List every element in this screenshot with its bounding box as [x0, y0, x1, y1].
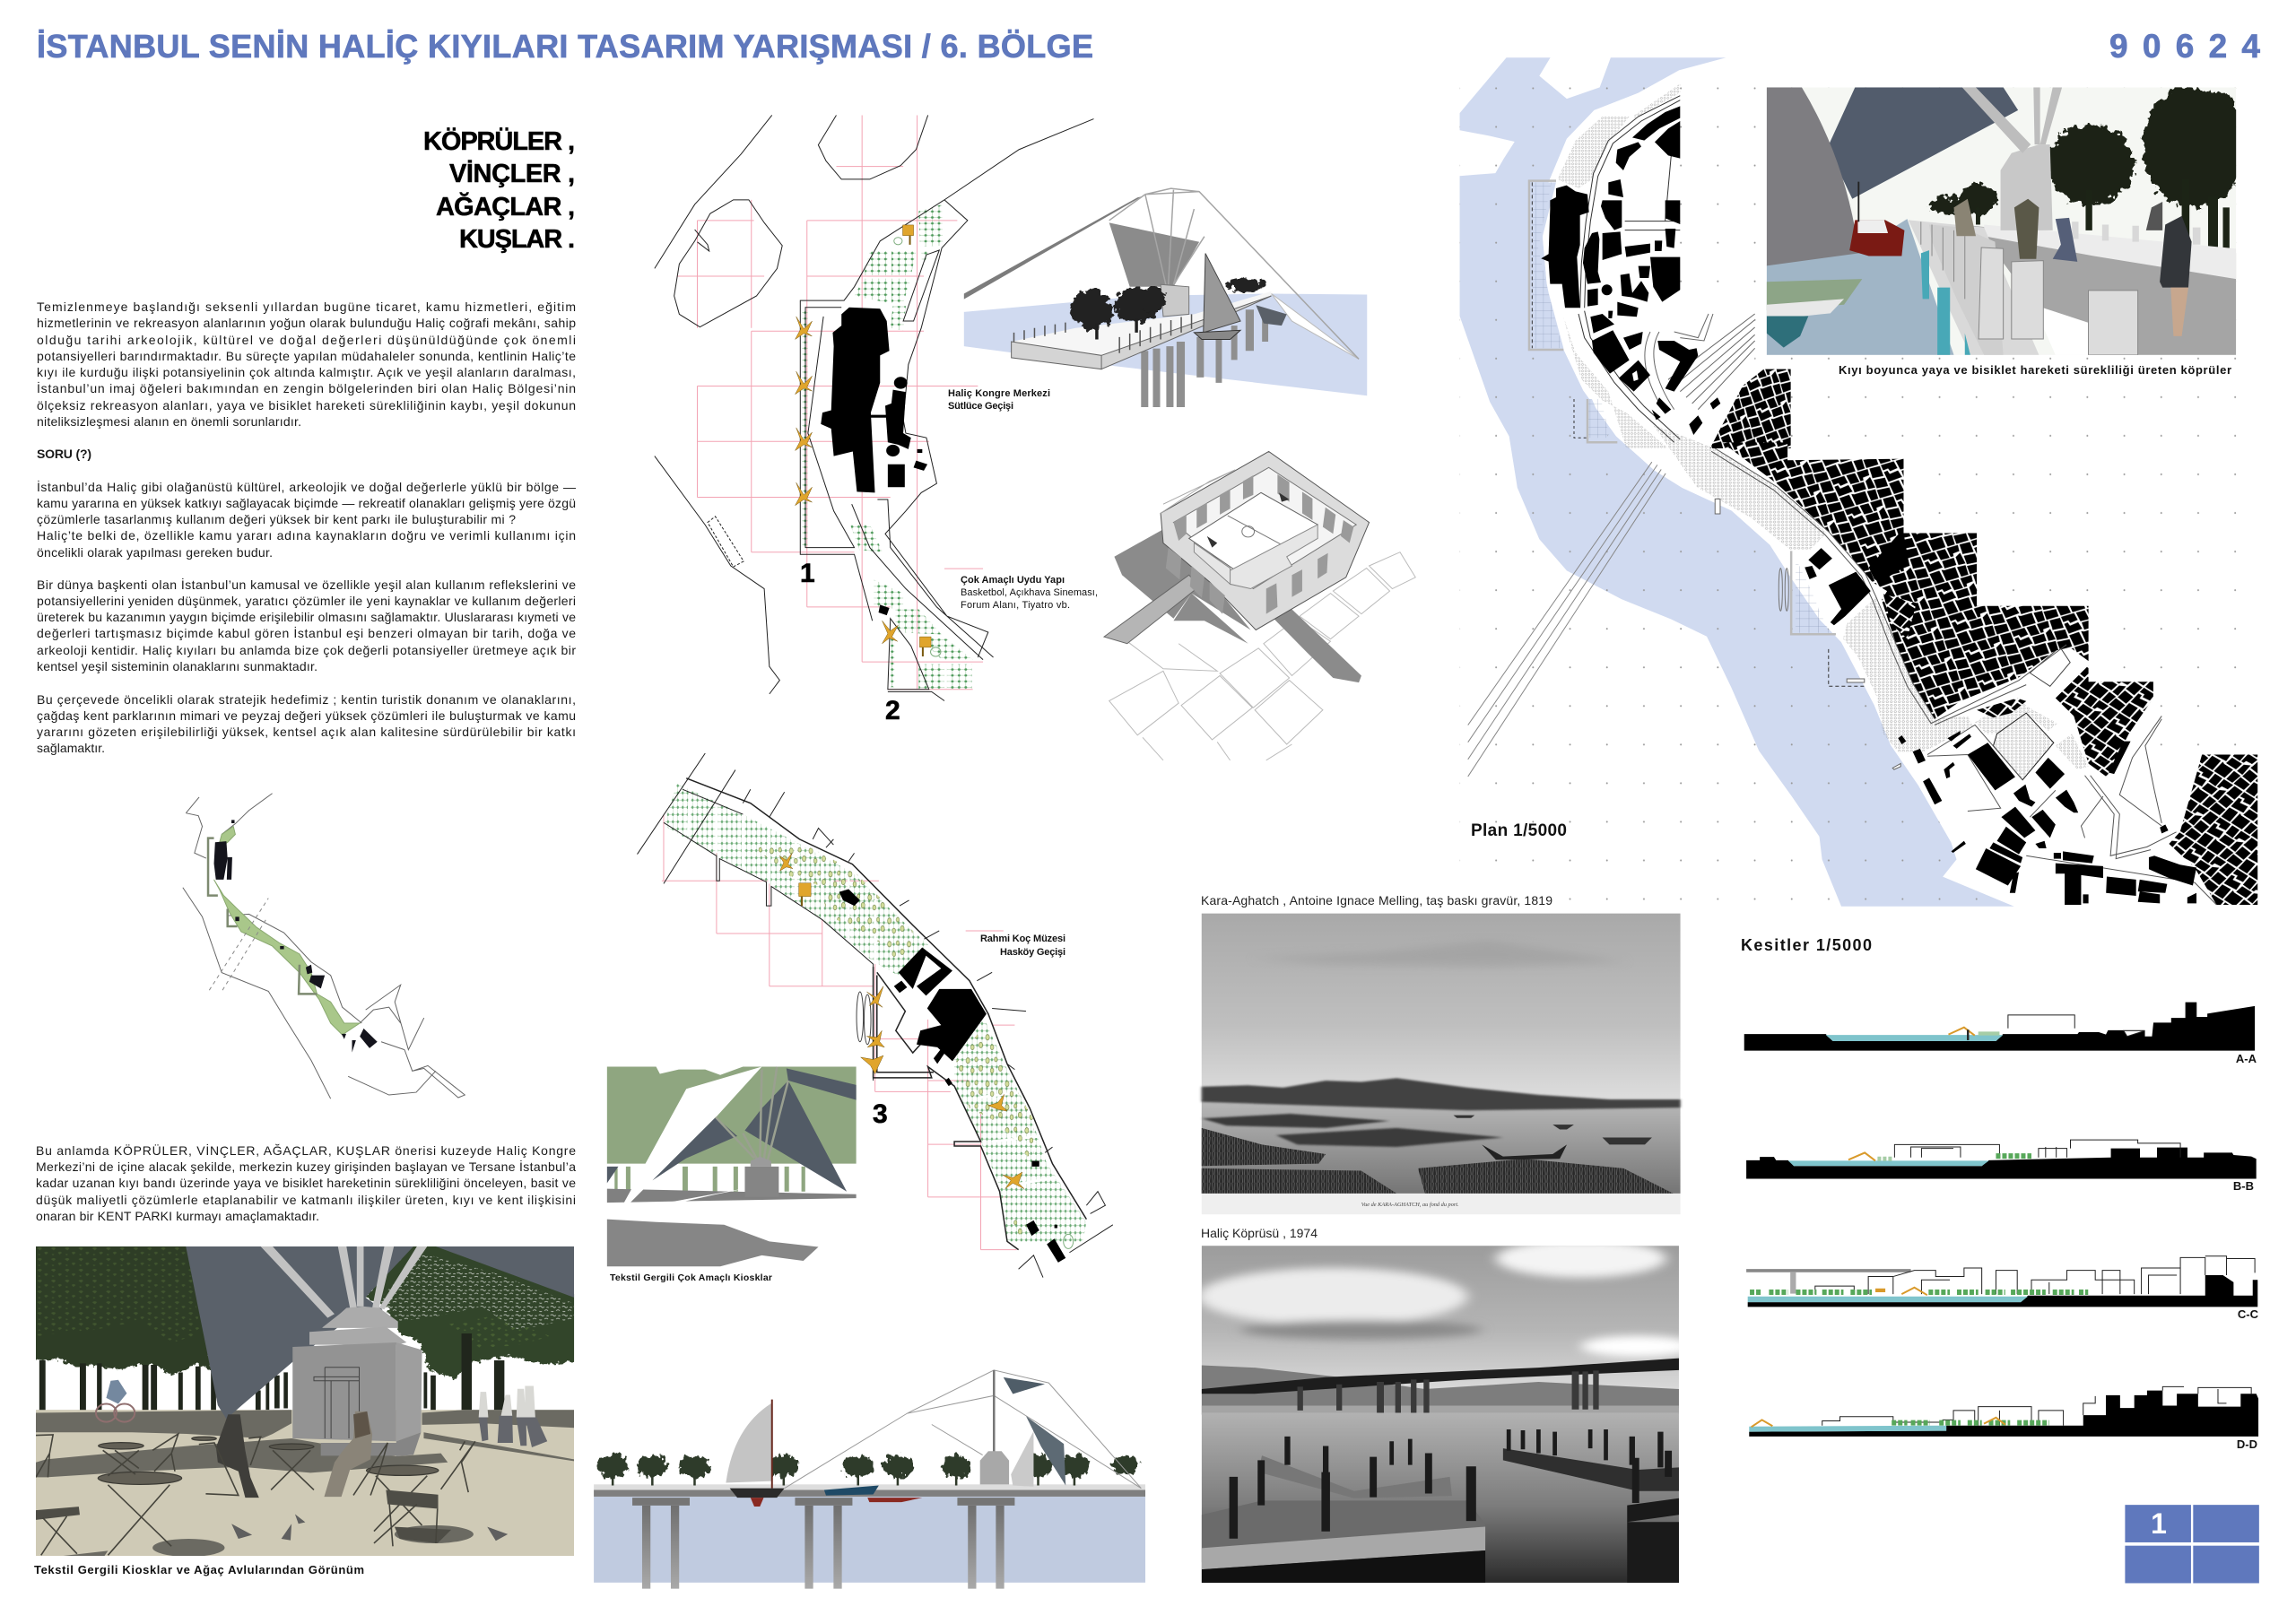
label: Rahmi Koç crossing: Rahmi Koç Müzesi: [980, 934, 1065, 944]
text block: introduction: İstanbul’un imaj öğeleri bakımından en zengin bölgelerinden biri olan Haliç Bölgesi’nin: [37, 380, 576, 395]
text block: introduction: potansiyellerini yeniden düşünmek, yaratıcı çözümler ile yeni kaynaklar ve kullanım değerleri: [37, 594, 576, 608]
text block: introduction: [37, 300, 576, 755]
large sail: [1767, 87, 1859, 265]
label: congress crossing: Haliç Kongre Merkezi: [948, 388, 1050, 399]
plan: Hasköy crossing: [638, 753, 1113, 1278]
trees: [1930, 87, 2242, 215]
photo: kiosks and tree courtyards: [26, 1238, 585, 1557]
historic engraving: [1202, 914, 1681, 1214]
text block: introduction: Temizlenmeye başlandığı seksenli yıllardan bugüne ticaret, kamu hizmetleri, eğitim: [37, 300, 576, 314]
ground: [36, 1410, 574, 1556]
orange cranes: [796, 317, 898, 644]
text block: introduction: sağlamaktır.: [37, 741, 105, 755]
text block: introduction: hizmetlerinin ve rekreasyon alanlarının yoğun olarak bulunduğu Haliç coğrafi mekânı, sahip: [37, 316, 576, 330]
buildings: [839, 890, 1065, 1263]
label B-B: B-B: [2233, 1179, 2254, 1193]
caption: kiosk view: Tekstil Gergili Kiosklar ve Ağaç Avlularından Görünüm: [34, 1563, 364, 1576]
heading: sections: Kesitler 1/5000: [1741, 936, 1872, 954]
land mask: [1542, 70, 2257, 907]
plan 1/5000: [1460, 57, 2258, 907]
orange cranes: [779, 853, 1024, 1189]
kiosk: [323, 1307, 398, 1328]
tables and chairs: [36, 1434, 475, 1555]
green tree grid: [802, 204, 973, 690]
text block: introduction: öncelikli olarak yapılması gereken budur.: [37, 545, 273, 560]
sail boat: [726, 1403, 772, 1482]
text block: introduction: Bir dünya başkenti olan İstanbul’un kamusal ve özellikle yeşil alan kullanım reflekslerini ve: [37, 577, 576, 592]
boats: [857, 992, 864, 1042]
text block: introduction: arkeoloji kentidir. Haliç kıyıları bu anlamda bize çok değerli potansiyeller üretmeye açık bir: [37, 643, 576, 657]
caption: shoreline bridges: Kıyı boyunca yaya ve bisiklet hareketi sürekliliği üreten köprüler: [1839, 363, 2231, 377]
bridge elevation: [594, 1370, 1145, 1589]
label C-C: C-C: [2238, 1307, 2259, 1321]
label: congress crossing: Sütlüce Geçişi: [948, 401, 1013, 412]
satellite building axonometric: [1104, 451, 1415, 760]
roads: [1578, 96, 1680, 442]
congress centre buildings: [821, 308, 927, 615]
central and southern plan: [1653, 424, 2257, 905]
red boat: [1849, 220, 1904, 256]
label: satellite building: Çok Amaçlı Uydu Yapı: [961, 575, 1065, 586]
zone number 3: 3: [873, 1099, 888, 1129]
text block: introduction: Bu çerçevede öncelikli olarak stratejik hedefimiz ; kentin turistik donanım ve olanaklarını,: [37, 692, 576, 707]
dense urban fabric: [1710, 369, 1791, 448]
text block: introduction: kıyı ile kurduğu ilişki potansiyelinin çok altında kalmıştır. Açık ve yeşil alanların daralması,: [37, 365, 576, 379]
text block: proposal summary: düşük maliyetli çözümlerle etaplanabilir ve katmanlı ilişkiler üreten, kıyı ve kent ilişkisini: [36, 1193, 576, 1207]
bridge lines: [1468, 462, 1665, 777]
third pier: [1796, 559, 1831, 633]
sheet number: 1: [2151, 1507, 2167, 1540]
heading: concept words: KÖPRÜLER ,: [423, 126, 575, 156]
text block: introduction: Haliç’te belki de, özellikle kamu yararı adına kaynakların doğru ve verimli kullanımı için: [37, 528, 576, 543]
text block: introduction: üreterek bu kazanımın yaygın biçimde erişilebilir olmasını sağlamaktır. Uluslararası kıymeti ve: [37, 610, 576, 624]
white cross paths: [688, 784, 1072, 1186]
photo: pedestrian bridge view: [1767, 87, 2242, 355]
label: Rahmi Koç crossing: Hasköy Geçişi: [1000, 947, 1065, 958]
people: [1954, 199, 2192, 336]
text block: introduction: kamu yararına en yüksek katkıyı sağlayacak biçimde — rekreatif olanakları gelişmiş yere özgü: [37, 496, 576, 510]
section C-C: [1746, 1256, 2257, 1307]
textile kiosk view: [607, 1067, 857, 1266]
text block: introduction: ölçeksiz rekreasyon alanları, yaya ve bisiklet hareketi sürekliliğinin kaybı, yeşil dokunun: [37, 398, 576, 413]
Haliç Bridge photo: [1198, 1239, 1694, 1583]
large buildings: [1805, 548, 2196, 905]
text block: proposal summary: kadar uzanan kıyı bandı üzerinde yaya ve bisiklet hareketinin sürekliliğini önceleyen, basit ve: [36, 1176, 576, 1190]
canopy and kiosk: [785, 1370, 1141, 1489]
text block: introduction: değerleri tartışmasız biçimde kabul gören İstanbul eşi benzeri olmayan bir tarih, doğa ve: [37, 625, 576, 640]
section B-B: [1746, 1140, 2257, 1179]
water: [1460, 57, 2014, 907]
text block: introduction: olduğu tarihi arkeolojik, kültürel ve doğal değerleri düşünüldüğünde çok önemli: [37, 333, 576, 347]
label D-D: D-D: [2237, 1437, 2257, 1451]
text block: proposal summary: Merkezi’ni de içine alacak şekilde, merkezin kuzey girişinden başlayan ve Tersane İstanbul’a: [36, 1159, 576, 1174]
water: [1767, 219, 1954, 355]
trees: [26, 1238, 585, 1423]
kiosk and masts: [2001, 144, 2053, 230]
buildings: [1541, 106, 1720, 435]
marsh: [1202, 1114, 1503, 1147]
figures: [96, 1380, 547, 1498]
coast outlines: [686, 778, 1086, 1220]
canopy: [186, 1246, 413, 1419]
green boat: [1767, 279, 1862, 310]
text block: introduction: niteliksizleşmesi alanın en önemli sorunlarıdır.: [37, 414, 301, 429]
caption: textile kiosks: Tekstil Gergili Çok Amaçlı Kiosklar: [610, 1272, 772, 1283]
walkway: [1962, 224, 2236, 355]
text block: introduction: çağdaş kent parklarının mimari ve peyzaj değeri yüksek çözümleri ile buluşturmak ve kamu: [37, 708, 576, 723]
sheet index squares: [2125, 1505, 2259, 1583]
text block: introduction: yararını gözeten erişilebilirliği yüksek, kentsel açık alan kalitesine sürdürülebilir bir katkı: [37, 725, 576, 739]
piers: [1532, 182, 1608, 438]
tree strips: [1653, 424, 2057, 751]
heading: concept words: [423, 126, 575, 254]
water: [1202, 1412, 1679, 1583]
railway lines: [1645, 314, 1755, 413]
clouds: [1198, 1239, 1694, 1357]
label: satellite building: Basketbol, Açıkhava Sineması,: [961, 587, 1098, 598]
tree strips: [1558, 117, 1668, 448]
caption: historic engraving: Kara-Aghatch , Antoine Ignace Melling, taş baskı gravür, 1819: [1201, 893, 1552, 908]
far shore: [1202, 1366, 1679, 1415]
caption: Haliç Bridge: Haliç Köprüsü , 1974: [1201, 1226, 1318, 1240]
pier wall: [1909, 220, 2039, 355]
label: satellite building: [961, 575, 1098, 611]
label A-A: A-A: [2236, 1052, 2257, 1065]
text block: introduction: SORU (?): [37, 447, 91, 461]
red grid: [677, 115, 983, 690]
trees: [596, 1455, 1138, 1477]
plan: Haliç Congress Centre crossing: [655, 115, 1093, 701]
title: İSTANBUL SENİN HALİÇ KIYILARI TASARIM YARIŞMASI / 6. BÖLGE: [37, 28, 1093, 65]
coast outlines: [655, 115, 1093, 701]
roads: [1711, 448, 2216, 905]
heading: concept words: KUŞLAR .: [459, 225, 575, 254]
text block: proposal summary: [36, 1142, 576, 1223]
text block: introduction: kentsel yeşil sisteminin olanaklarını sunmaktadır.: [37, 659, 317, 673]
northern plan: [1529, 83, 1791, 448]
label: Rahmi Koç crossing: [980, 934, 1065, 958]
zone number 1: 1: [800, 559, 815, 588]
hills: [1202, 1078, 1681, 1110]
heading: concept words: AĞAÇLAR ,: [436, 191, 575, 221]
text block: introduction: çözümlerle tasarlanmış kullanım değeri yüksek bir kent parkı ile buluşturabilir mi ?: [37, 512, 516, 526]
bridge perspective: [964, 188, 1367, 407]
floating jetties: [1202, 1500, 1485, 1562]
red grid: [662, 803, 1017, 1250]
text block: introduction: İstanbul’da Haliç gibi olağanüstü kültürel, arkeolojik ve doğal değerlerle yüklü bir bölge —: [37, 479, 576, 494]
bridge: [1202, 1359, 1679, 1394]
label: plan scale: Plan 1/5000: [1471, 821, 1567, 840]
section D-D: [1749, 1386, 2258, 1437]
dense urban fabric: [1722, 442, 2089, 719]
text block: proposal summary: Bu anlamda KÖPRÜLER, VİNÇLER, AĞAÇLAR, KUŞLAR önerisi kuzeyde Haliç Kongre: [36, 1142, 576, 1158]
label: congress crossing: [948, 388, 1050, 412]
key map: [183, 794, 465, 1099]
historic engraving: Vue de KARA-AGHATCH, au fond du port.: [1361, 1202, 1459, 1208]
pigeons: [231, 1515, 508, 1541]
text block: proposal summary: onaran bir KENT PARKI kurmayı amaçlamaktadır.: [36, 1209, 319, 1223]
green tree grid: [664, 784, 1086, 1241]
zone number 2: 2: [885, 696, 900, 725]
text block: introduction: potansiyelleri barındırmaktadır. Bu süreçte yapılan müdahaleler sonunda, kentlinin Haliç’te: [37, 349, 576, 363]
label: satellite building: Forum Alanı, Tiyatro vb.: [961, 600, 1070, 611]
project number: 90624: [2109, 28, 2260, 65]
olive tree clusters: [754, 842, 1033, 1236]
heading: concept words: VİNÇLER ,: [449, 160, 575, 188]
trees: [1072, 277, 1264, 329]
section A-A: [1744, 1003, 2255, 1051]
